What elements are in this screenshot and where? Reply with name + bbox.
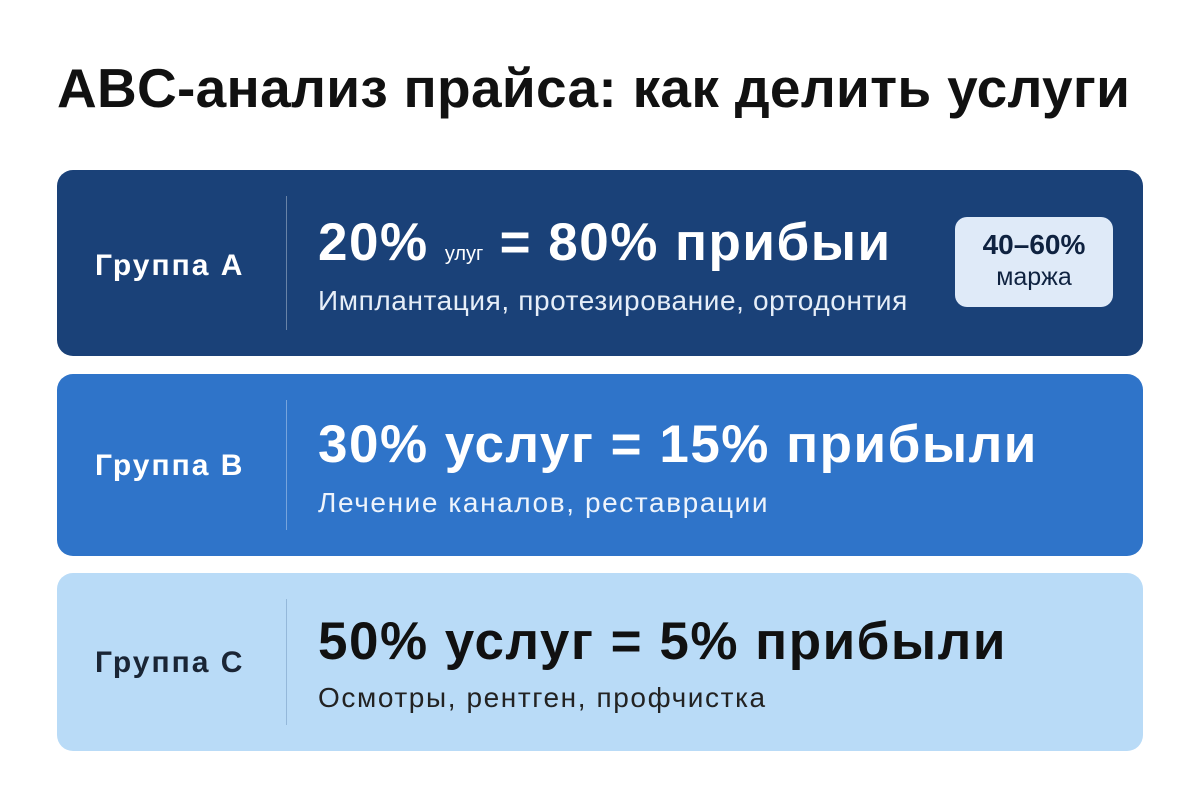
badge: margin <box>955 217 1113 307</box>
headline B: 30% услуг = 15% прибыли <box>318 415 1038 474</box>
panel: group C <box>57 573 1143 751</box>
badge: margin: маржа <box>996 263 1072 291</box>
subtext C: Осмотры, рентген, профчистка <box>318 682 767 713</box>
subtext B: Лечение каналов, реставрации <box>318 487 769 518</box>
headline C: 50% услуг = 5% прибыли <box>318 612 1007 671</box>
label: group B: Группа B <box>95 449 244 482</box>
badge: margin: 40–60% <box>983 229 1085 260</box>
subtext A: Имплантация, протезирование, ортодонтия <box>318 285 908 316</box>
label: group C: Группа C <box>95 646 244 679</box>
panel: group A <box>57 170 1143 356</box>
title: ABC-анализ прайса: как делить услуги <box>57 57 1130 119</box>
label: group A: Группа A <box>95 249 244 282</box>
panel: group B <box>57 374 1143 556</box>
headline A: 20% улуг = 80% прибыи <box>318 213 892 272</box>
